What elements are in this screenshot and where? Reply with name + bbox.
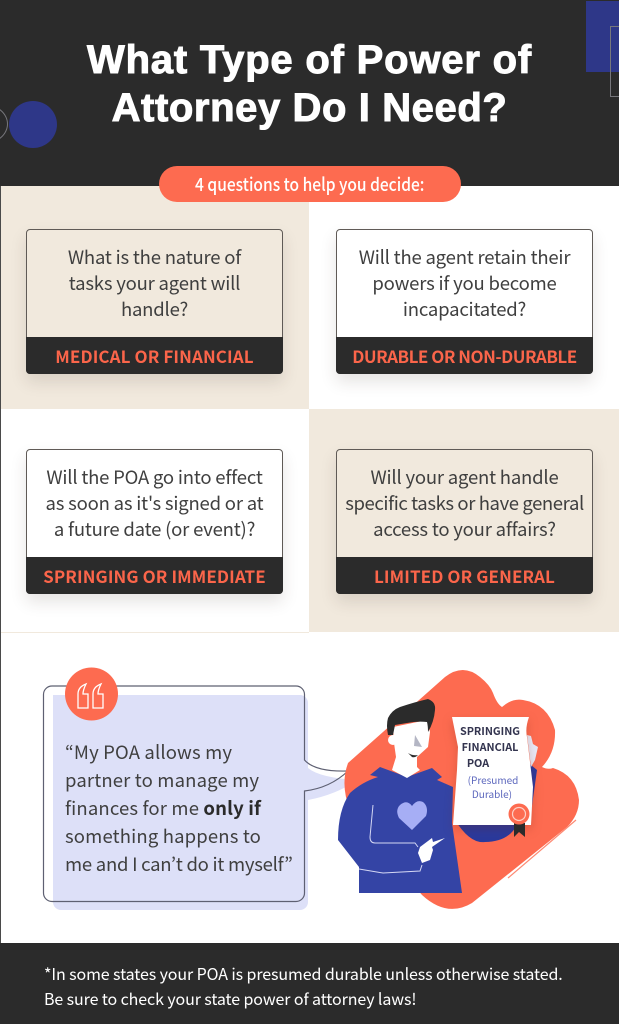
divider line xyxy=(1,632,309,633)
card: medical or financial xyxy=(26,229,283,374)
back arm xyxy=(455,760,537,842)
decoration: blue circle xyxy=(9,101,57,148)
decoration: outlined circle xyxy=(0,104,8,144)
card: limited or general xyxy=(336,449,593,594)
subtitle pill xyxy=(159,166,461,202)
raised hand xyxy=(527,735,538,767)
title: What Type of Power of xyxy=(87,38,532,82)
footer note: *In some states your POA is presumed durable unless otherwise stated. xyxy=(44,961,563,985)
left edge line xyxy=(0,186,1,943)
quote text: me and I can’t do it myself” xyxy=(65,851,293,877)
title: Attorney Do I Need? xyxy=(112,86,507,130)
quote text: partner to manage my xyxy=(65,767,259,793)
neck and face xyxy=(392,720,430,778)
title xyxy=(86,38,532,130)
card: springing or immediate: Will the POA go into effect xyxy=(46,464,263,490)
icon: quotation mark badge xyxy=(65,668,118,720)
bubble fill xyxy=(53,695,358,910)
footer note: Be sure to check your state power of attorney laws! xyxy=(44,986,416,1010)
document text: Durable) xyxy=(472,786,512,801)
card: springing or immediate: SPRINGING OR IMMEDIATE xyxy=(43,563,266,588)
card: medical or financial: handle? xyxy=(121,296,188,322)
card: medical or financial: What is the nature of xyxy=(68,244,241,270)
header band xyxy=(0,0,619,186)
subtitle pill: 4 questions to help you decide: xyxy=(195,171,425,197)
document text: POA xyxy=(467,755,489,771)
card: limited or general: LIMITED OR GENERAL xyxy=(374,563,555,588)
card: limited or general: access to your affairs? xyxy=(373,516,556,542)
nose xyxy=(414,735,422,747)
card: durable or non-durable: DURABLE OR NON-DURABLE xyxy=(352,343,577,368)
card: springing or immediate: as soon as it's signed or at xyxy=(46,490,263,516)
document xyxy=(452,717,533,825)
hair xyxy=(387,699,435,735)
card: durable or non-durable: powers if you become xyxy=(372,270,557,296)
seal xyxy=(508,804,530,824)
quote text: “My POA allows my xyxy=(65,739,232,765)
mouth xyxy=(408,753,418,757)
decoration: outlined rectangle xyxy=(610,26,619,97)
footer note xyxy=(44,961,563,1010)
pointing hand xyxy=(418,838,445,863)
card: durable or non-durable: incapacitated? xyxy=(403,296,526,322)
card: limited or general: specific tasks or have general xyxy=(345,490,584,516)
ear xyxy=(388,735,398,745)
card: springing or immediate: a future date (or event)? xyxy=(54,516,255,542)
heart xyxy=(397,801,427,830)
accent line xyxy=(508,820,576,878)
document text xyxy=(460,723,520,801)
footer band xyxy=(0,943,619,1024)
quote text: something happens to xyxy=(65,823,261,849)
card: durable or non-durable: Will the agent retain their xyxy=(359,244,570,270)
card: limited or general: Will your agent handle xyxy=(370,464,559,490)
document text: FINANCIAL xyxy=(462,739,518,755)
illustration: person holding document xyxy=(338,670,579,909)
decoration: blue rectangle xyxy=(586,1,619,72)
card: durable or non-durable xyxy=(336,229,593,374)
quote text xyxy=(65,739,293,877)
ribbon tails xyxy=(514,823,525,837)
sleeve line xyxy=(359,805,422,873)
orange blob xyxy=(344,670,579,909)
panel: question 1 background xyxy=(1,186,309,409)
bubble outline xyxy=(44,686,348,902)
card: springing or immediate xyxy=(26,449,283,594)
quote bubble xyxy=(42,685,346,910)
quote text: finances for me only if xyxy=(65,795,261,821)
hoodie xyxy=(338,767,462,893)
card: medical or financial: MEDICAL OR FINANCIAL xyxy=(55,343,254,368)
document text: (Presumed xyxy=(468,772,518,787)
card: medical or financial: tasks your agent will xyxy=(69,270,240,296)
panel: question 4 background xyxy=(309,409,619,632)
document text: SPRINGING xyxy=(460,723,520,739)
